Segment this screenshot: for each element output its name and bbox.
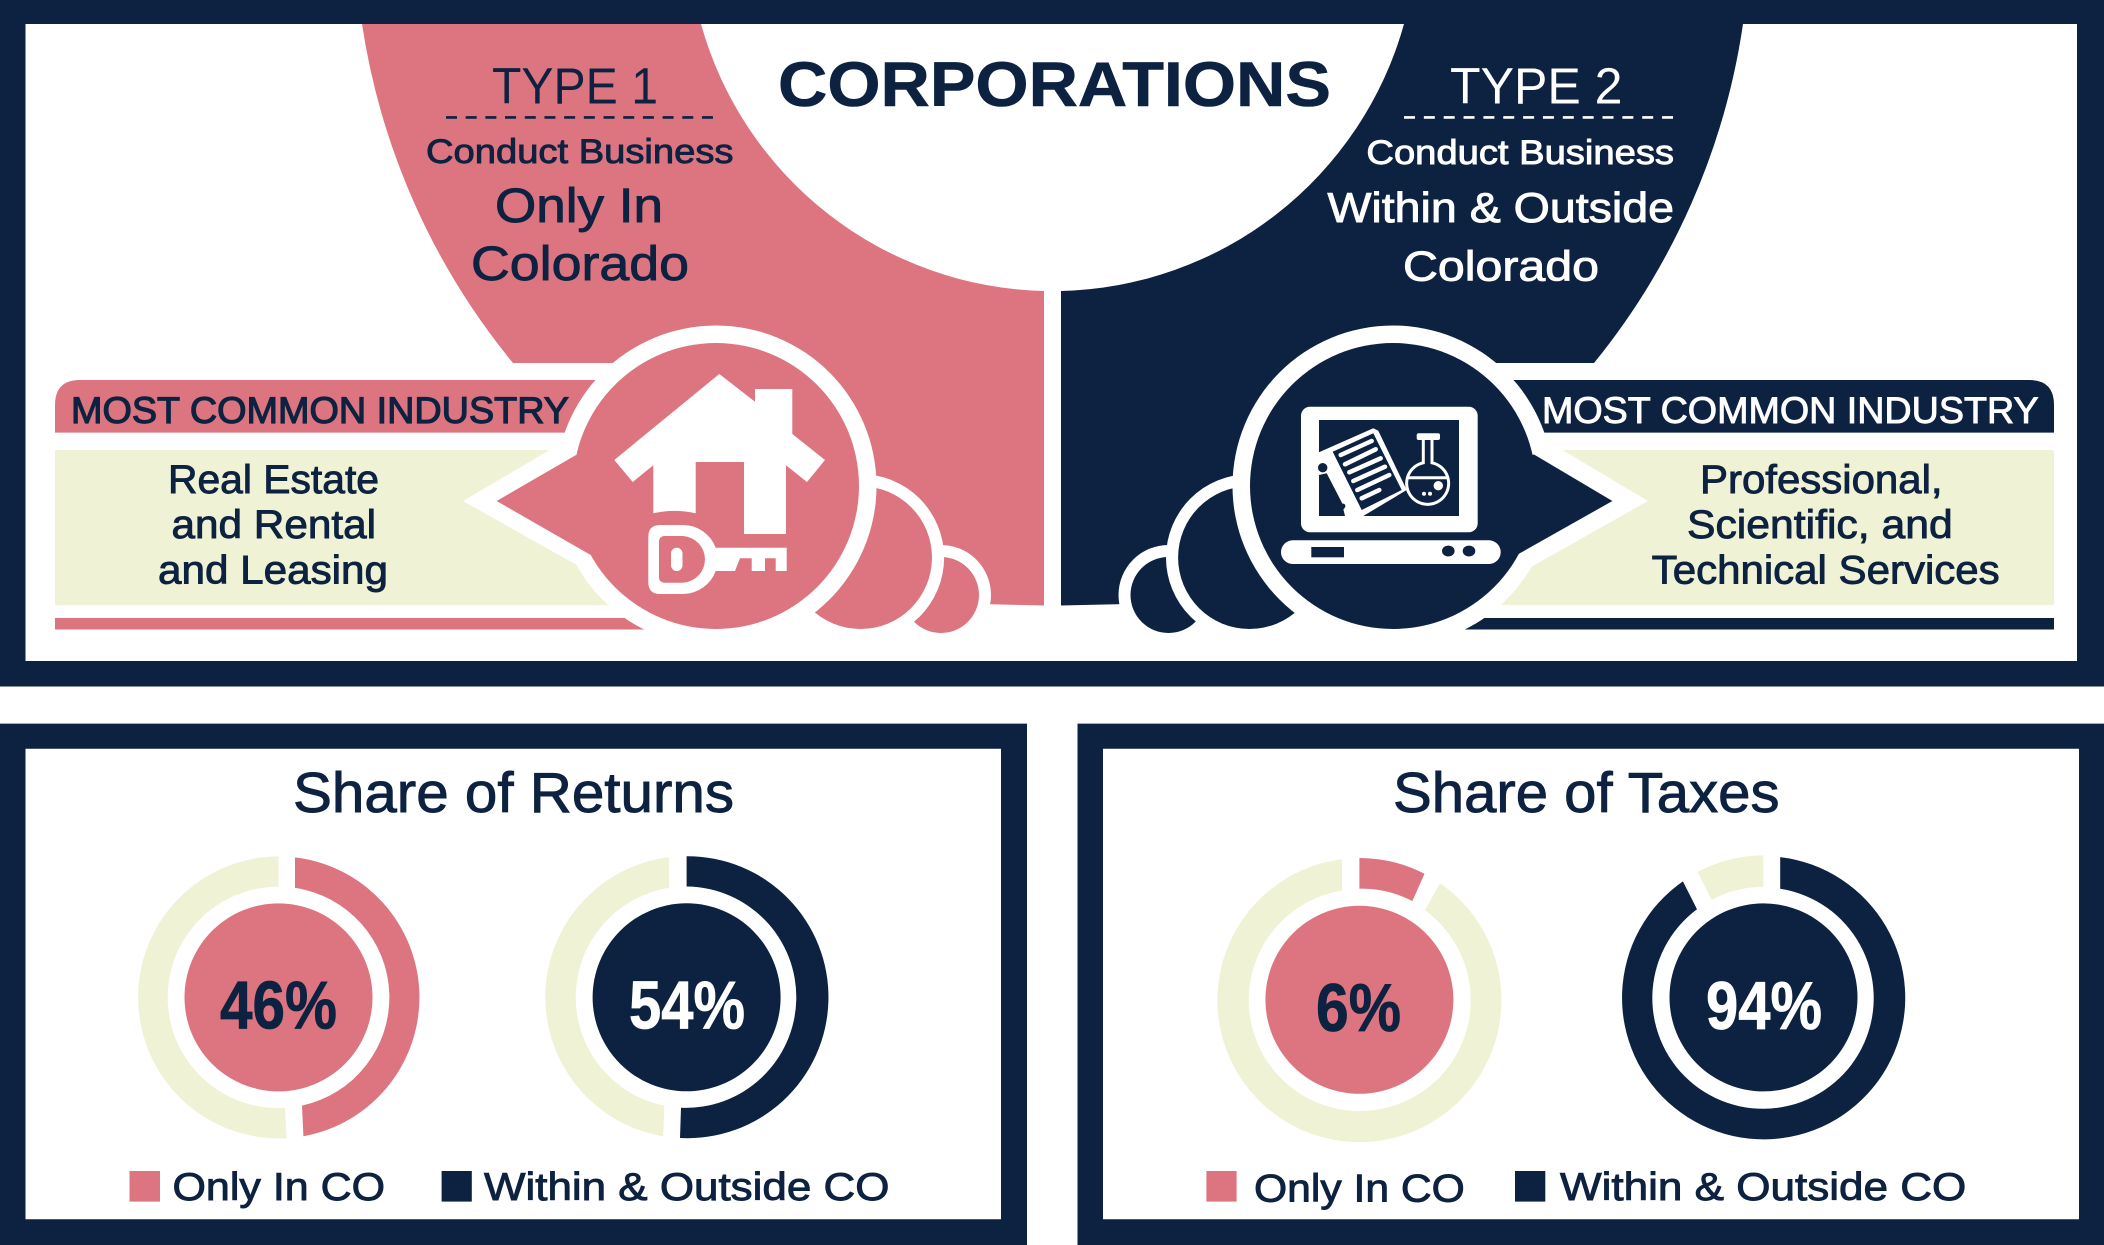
taxes heading: Share of Taxes bbox=[1393, 761, 1780, 825]
taxes panel frame bbox=[1078, 724, 2104, 1245]
type 2 navy arc shape bbox=[1061, 24, 1743, 606]
speech bubble type 2 bbox=[1232, 326, 1648, 646]
type 2 within and outside colorado text: Colorado bbox=[1403, 242, 1599, 290]
type 2 industry name: Professional, bbox=[1700, 458, 1943, 502]
panel: share of taxes bbox=[1078, 724, 2104, 1245]
type 1 industry name bbox=[158, 458, 388, 592]
type 2 industry name bbox=[1652, 458, 2000, 592]
donut: 46 percent only in CO: 46% bbox=[220, 968, 337, 1044]
donut: 94 percent within and outside CO: 94% bbox=[1706, 968, 1822, 1044]
donut: 46 percent only in CO bbox=[138, 856, 419, 1138]
type 1 heading: TYPE 1 bbox=[492, 58, 658, 115]
type 2 heading: TYPE 2 bbox=[1450, 58, 1622, 115]
type 2 industry header bar bbox=[1470, 380, 2054, 433]
type 1 bottom strip bbox=[55, 618, 700, 630]
decorative small bubble right bbox=[1118, 545, 1218, 645]
type 1 industry header bar bbox=[55, 380, 640, 433]
type 2 industry name: Technical Services bbox=[1652, 548, 2000, 592]
legend: returns: Within & Outside CO bbox=[484, 1166, 889, 1209]
legend: returns bbox=[130, 1166, 889, 1209]
type 2 conduct business text: Conduct Business bbox=[1366, 134, 1674, 172]
panel: type 1 bbox=[55, 24, 1044, 646]
panel: type 2 bbox=[1061, 24, 2054, 646]
donut: 6 percent only in CO bbox=[1217, 858, 1501, 1142]
type 2 industry label: MOST COMMON INDUSTRY bbox=[1542, 390, 2039, 431]
donut: 6 percent only in CO: 6% bbox=[1316, 970, 1401, 1046]
donut: 54 percent within and outside CO: 54% bbox=[629, 968, 745, 1044]
legend: returns: Only In CO bbox=[172, 1166, 385, 1209]
type 1 industry label: MOST COMMON INDUSTRY bbox=[71, 390, 569, 431]
legend: taxes: Within & Outside CO bbox=[1560, 1166, 1966, 1209]
decorative medium bubble left bbox=[777, 474, 944, 641]
title: CORPORATIONS bbox=[778, 50, 1331, 120]
icon: key bbox=[648, 525, 787, 594]
legend: taxes: Only In CO bbox=[1254, 1168, 1465, 1211]
type 1 dashed divider bbox=[446, 116, 713, 119]
type 1 industry name: Real Estate bbox=[168, 458, 379, 502]
type 1 only in colorado text bbox=[471, 180, 689, 291]
donut: 94 percent within and outside CO bbox=[1622, 855, 1905, 1139]
type 1 industry name: and Rental bbox=[172, 503, 376, 547]
icon: laptop with document and flask bbox=[1281, 407, 1501, 564]
returns panel frame bbox=[0, 724, 1027, 1245]
panel: share of returns bbox=[0, 724, 1027, 1245]
type 2 within and outside colorado text bbox=[1328, 184, 1674, 290]
returns heading: Share of Returns bbox=[293, 761, 734, 825]
panel: corporations overview bbox=[0, 0, 2104, 686]
type 1 only in colorado text: Colorado bbox=[471, 238, 689, 291]
type 1 only in colorado text: Only In bbox=[495, 180, 663, 233]
type 2 within and outside colorado text: Within & Outside bbox=[1328, 184, 1674, 231]
icon: house bbox=[614, 374, 825, 534]
type 2 industry name: Scientific, and bbox=[1687, 503, 1953, 547]
type 1 conduct business text: Conduct Business bbox=[426, 133, 734, 171]
type 2 industry cream box bbox=[1470, 450, 2054, 605]
top panel frame bbox=[0, 0, 2104, 686]
type 1 industry name: and Leasing bbox=[158, 548, 388, 592]
speech bubble type 1 bbox=[463, 326, 876, 646]
legend: taxes bbox=[1206, 1166, 1966, 1211]
type 1 industry cream box bbox=[55, 450, 640, 605]
type 1 pink arc shape bbox=[362, 24, 1044, 606]
type 2 dashed divider bbox=[1404, 116, 1673, 119]
decorative small bubble left bbox=[891, 545, 991, 645]
type 2 bottom strip bbox=[1400, 618, 2054, 630]
donut: 54 percent within and outside CO bbox=[545, 856, 828, 1138]
decorative medium bubble right bbox=[1166, 474, 1333, 641]
